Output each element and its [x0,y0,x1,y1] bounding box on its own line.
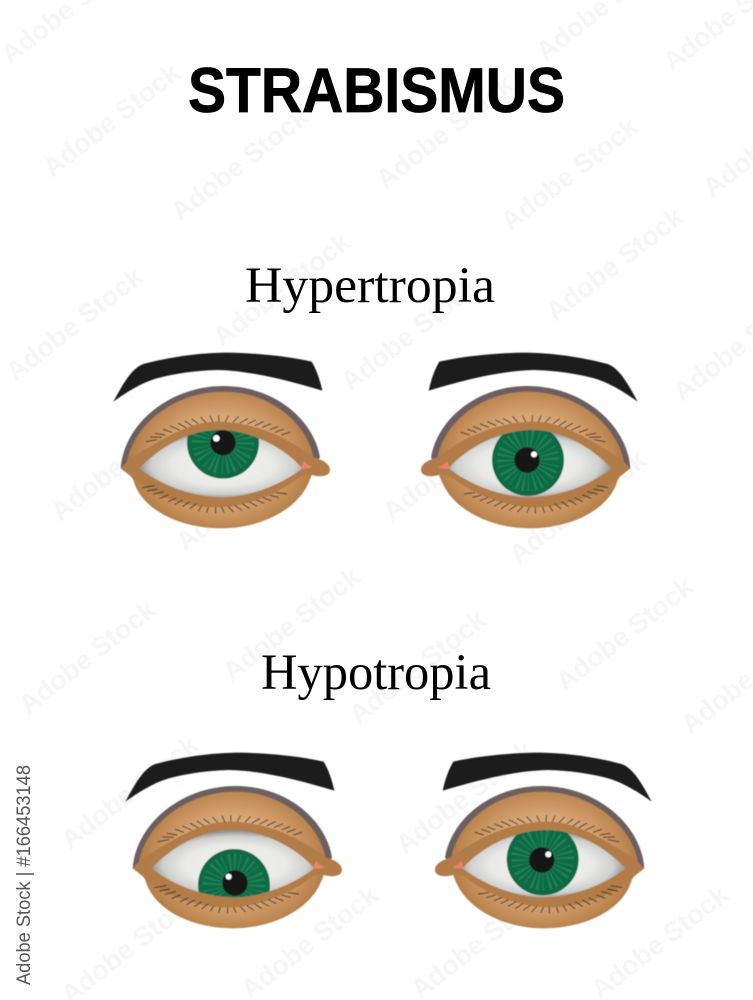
stock id label: Adobe Stock | #166453148 [14,765,35,985]
watermark pattern: Adobe Stock [377,401,527,527]
watermark pattern: Adobe Stock [540,201,690,327]
eye: hypertropia left, iris raised [113,353,330,528]
watermark pattern: Adobe Stock [503,444,653,570]
watermark pattern: Adobe Stock [370,69,520,195]
watermark pattern: Adobe Stock [217,561,367,687]
watermark pattern: Adobe Stock [165,101,315,227]
watermark pattern: Adobe Stock [495,111,645,237]
watermark pattern: Adobe Stock [37,57,187,183]
watermark pattern: Adobe Stock [0,261,150,387]
watermark pattern: Adobe Stock [335,271,485,397]
heading: Hypotropia: Hypotropia [261,645,491,701]
watermark pattern: Adobe Stock [13,594,163,720]
heading: Hypertropia: Hypertropia [245,258,495,314]
watermark pattern: Adobe Stock [207,226,357,352]
watermark pattern: Adobe Stock [550,571,700,697]
watermark pattern: Adobe Stock [343,604,493,730]
eye: hypotropia left, iris lowered [125,753,342,928]
watermark pattern: Adobe Stock [390,734,540,860]
watermark pattern: Adobe Stock [45,401,195,527]
watermark pattern: Adobe Stock [170,431,320,557]
eye: hypertropia right, iris straight [421,353,638,528]
title: STRABISMUS [188,56,565,126]
eye: hypotropia right, iris straight [435,753,652,928]
watermark pattern: Adobe Stock [55,729,205,855]
